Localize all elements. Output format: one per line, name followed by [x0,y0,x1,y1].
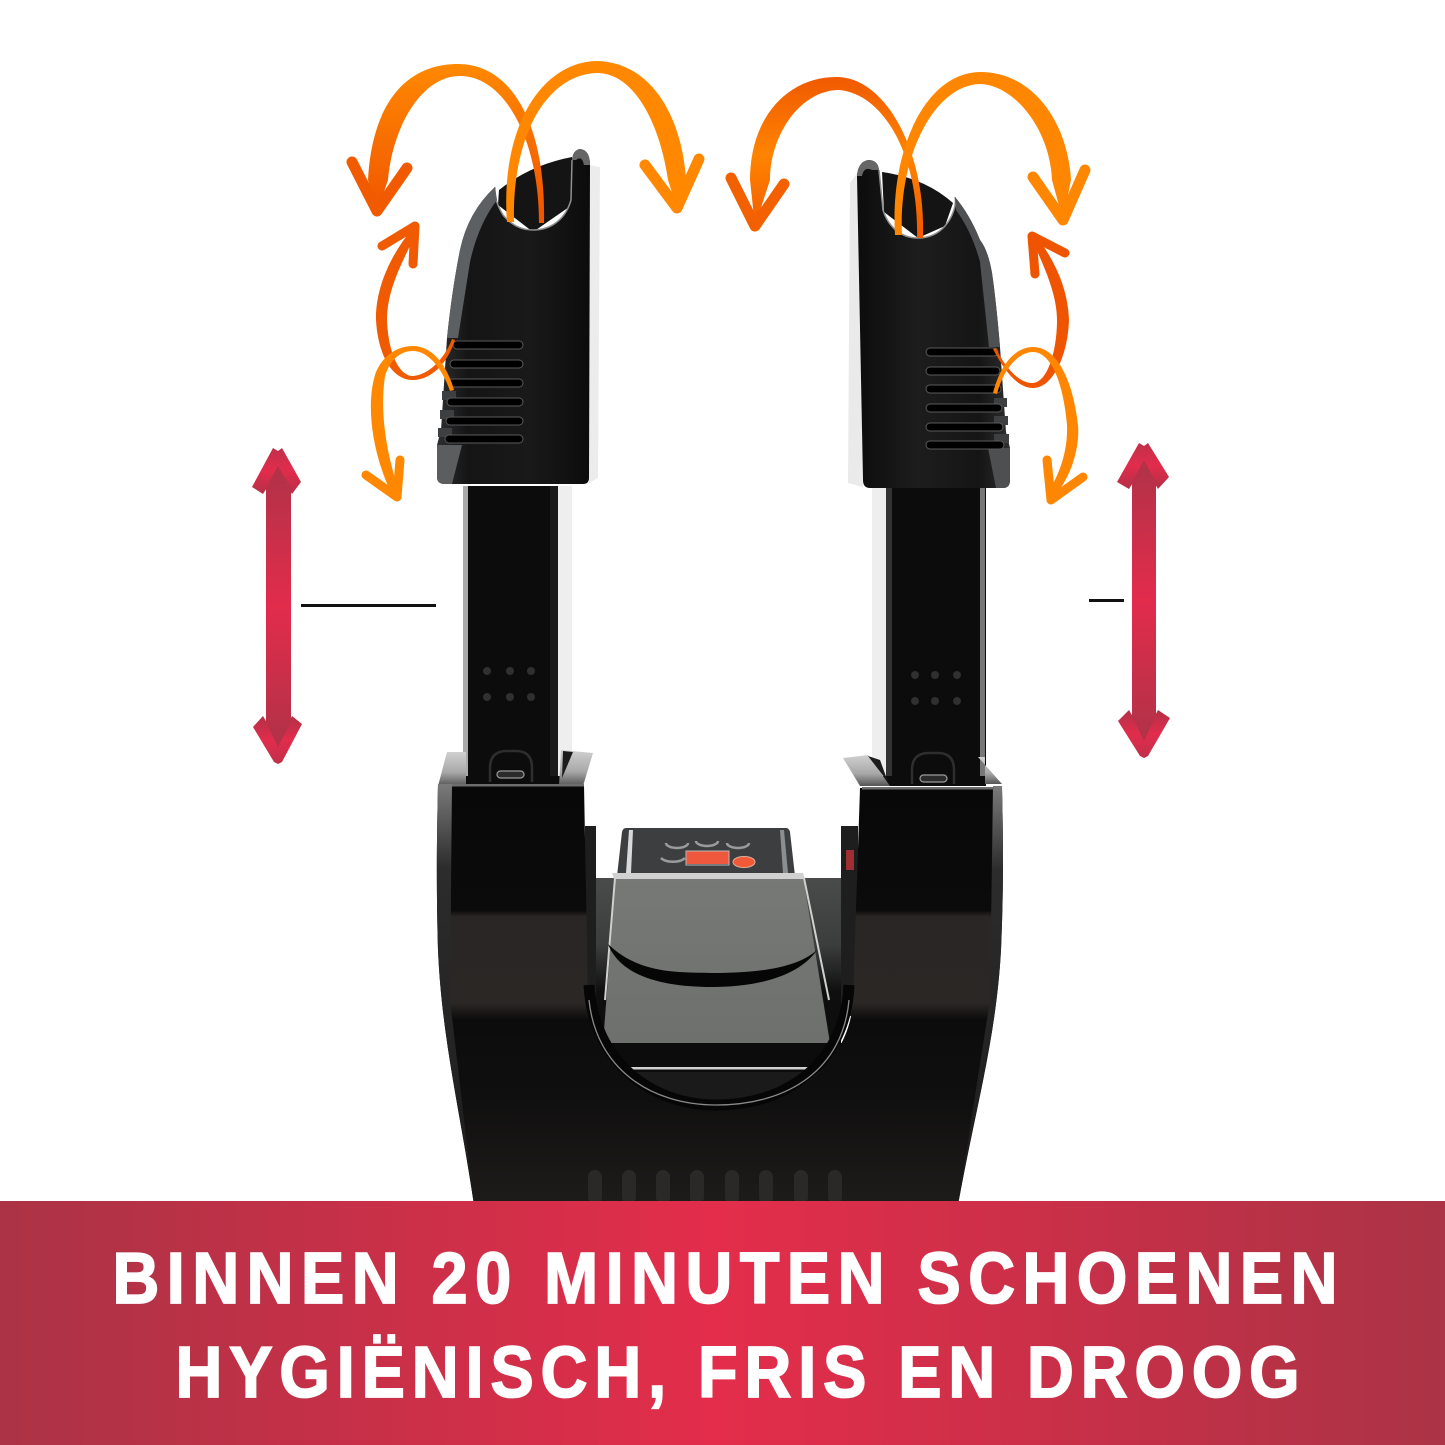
base housing [437,750,1003,1205]
banner [0,1201,1445,1445]
right stem [872,486,986,786]
banner headline: HYGIËNISCH, FRIS EN DROOG [176,1332,1300,1413]
arrow: side down curve [993,347,1083,500]
airflow arrows left [352,61,699,497]
arrow: side up curve [993,236,1069,388]
product: shoe dryer [437,149,1010,1205]
height arrow right [1117,443,1170,758]
arrow: side up curve [376,226,455,380]
height arrow left [252,448,302,764]
right head [848,160,1010,488]
left stem [463,486,572,786]
left head [437,149,600,484]
arrow: side down curve [366,346,454,497]
line marker right [1089,599,1124,602]
line marker left [301,604,436,607]
banner headline: BINNEN 20 MINUTEN SCHOENEN [113,1238,1337,1319]
rear platform and control panel [595,828,846,1112]
arrow: top left curve [731,77,923,238]
arrow: top right curve [895,72,1085,235]
arrow: top right curve [506,61,699,222]
arrow: top left curve [352,64,544,223]
airflow arrows right [731,72,1085,500]
